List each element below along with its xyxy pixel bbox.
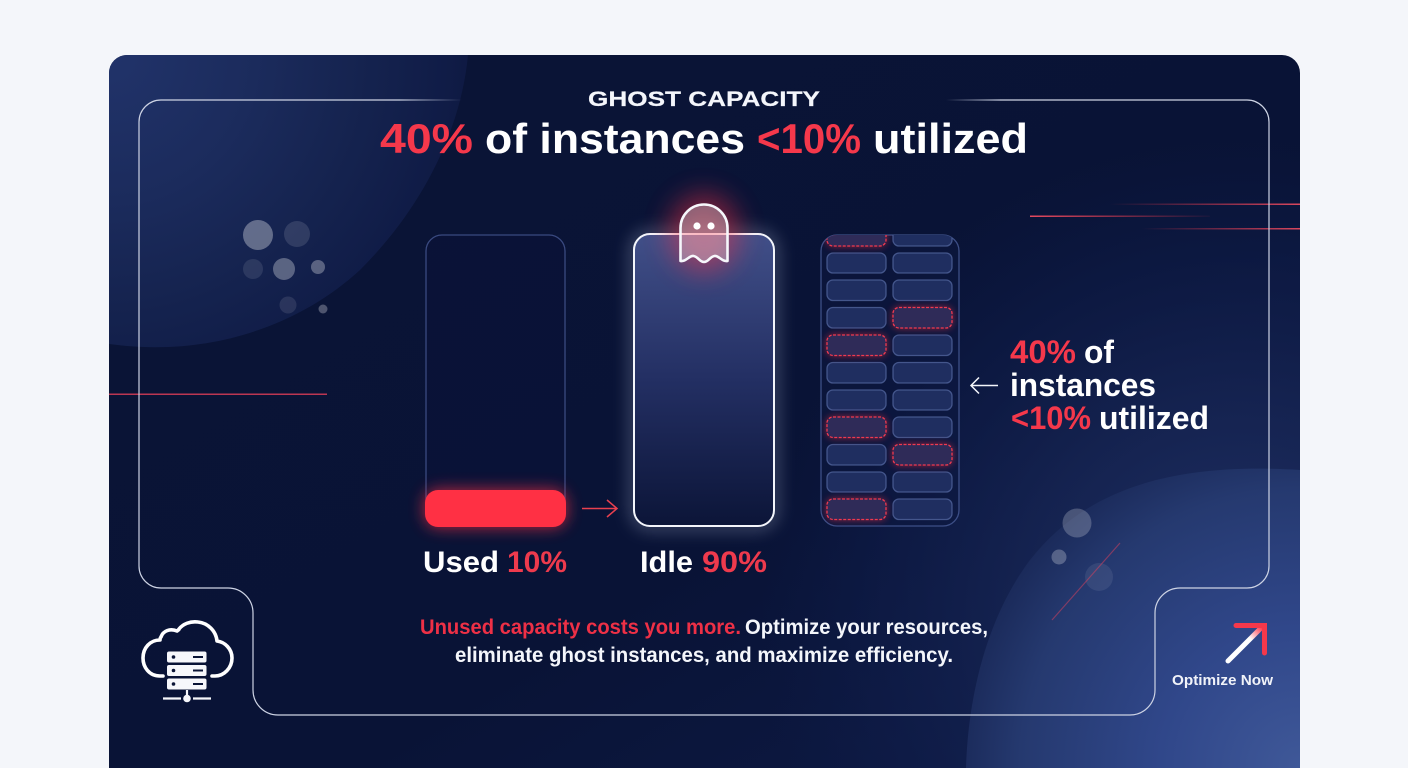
accent line: left [109, 394, 327, 395]
label: optimize now: Optimize Now [1172, 672, 1273, 689]
arrow: used to idle [582, 500, 617, 517]
arrow: to instance stack [971, 378, 998, 394]
callout: 40% of instances <10% utilized [1010, 334, 1209, 436]
callout: 40% of instances <10% utilized: <10% [1011, 400, 1091, 436]
body text: Optimize your resources, [745, 616, 988, 639]
body text: eliminate ghost instances, and maximize efficiency. [455, 644, 953, 667]
callout: 40% of instances <10% utilized: instances [1010, 367, 1156, 403]
decorative blob: bottom right [966, 469, 1300, 768]
body text [420, 616, 988, 667]
ghost instances [827, 226, 952, 520]
label: used 10% [423, 546, 567, 579]
used fill glow [425, 490, 566, 527]
icon: cloud server [143, 622, 232, 702]
icon: optimize arrow [1228, 626, 1264, 661]
label: idle 90% [640, 546, 767, 579]
network base [163, 690, 211, 698]
bar: idle 90% [634, 234, 774, 526]
callout: 40% of instances <10% utilized: 40% [1010, 334, 1076, 370]
icon: ghost [668, 193, 740, 273]
title: <10% [757, 115, 861, 162]
used fill [425, 490, 566, 527]
instance stack [821, 226, 959, 526]
ghost instance glows [827, 226, 952, 520]
bar: used 10% [425, 235, 566, 527]
decorative dots: bottom right [1052, 508, 1113, 591]
callout: 40% of instances <10% utilized: utilized [1099, 400, 1209, 436]
accent lines: top right [1030, 204, 1300, 230]
title: utilized [873, 115, 1028, 162]
server racks [167, 652, 206, 690]
heading: ghost capacity: GHOST CAPACITY [588, 88, 820, 111]
title: of instances [485, 115, 745, 162]
title: 40% [380, 115, 473, 162]
label: idle 90%: 90% [702, 546, 767, 579]
decorative blob: top left [109, 55, 468, 347]
label: used 10%: Used [423, 546, 499, 579]
title [380, 115, 1028, 162]
normal instances [827, 226, 952, 520]
label: used 10%: 10% [507, 546, 567, 579]
callout: 40% of instances <10% utilized: of [1084, 334, 1114, 370]
label: idle 90%: Idle [640, 546, 693, 579]
body text: Unused capacity costs you more. [420, 616, 741, 639]
panel: dark card [109, 55, 1300, 768]
decorative dots: top left [243, 220, 328, 314]
accent line: diagonal [1052, 543, 1120, 620]
frame outline [139, 99, 1269, 715]
